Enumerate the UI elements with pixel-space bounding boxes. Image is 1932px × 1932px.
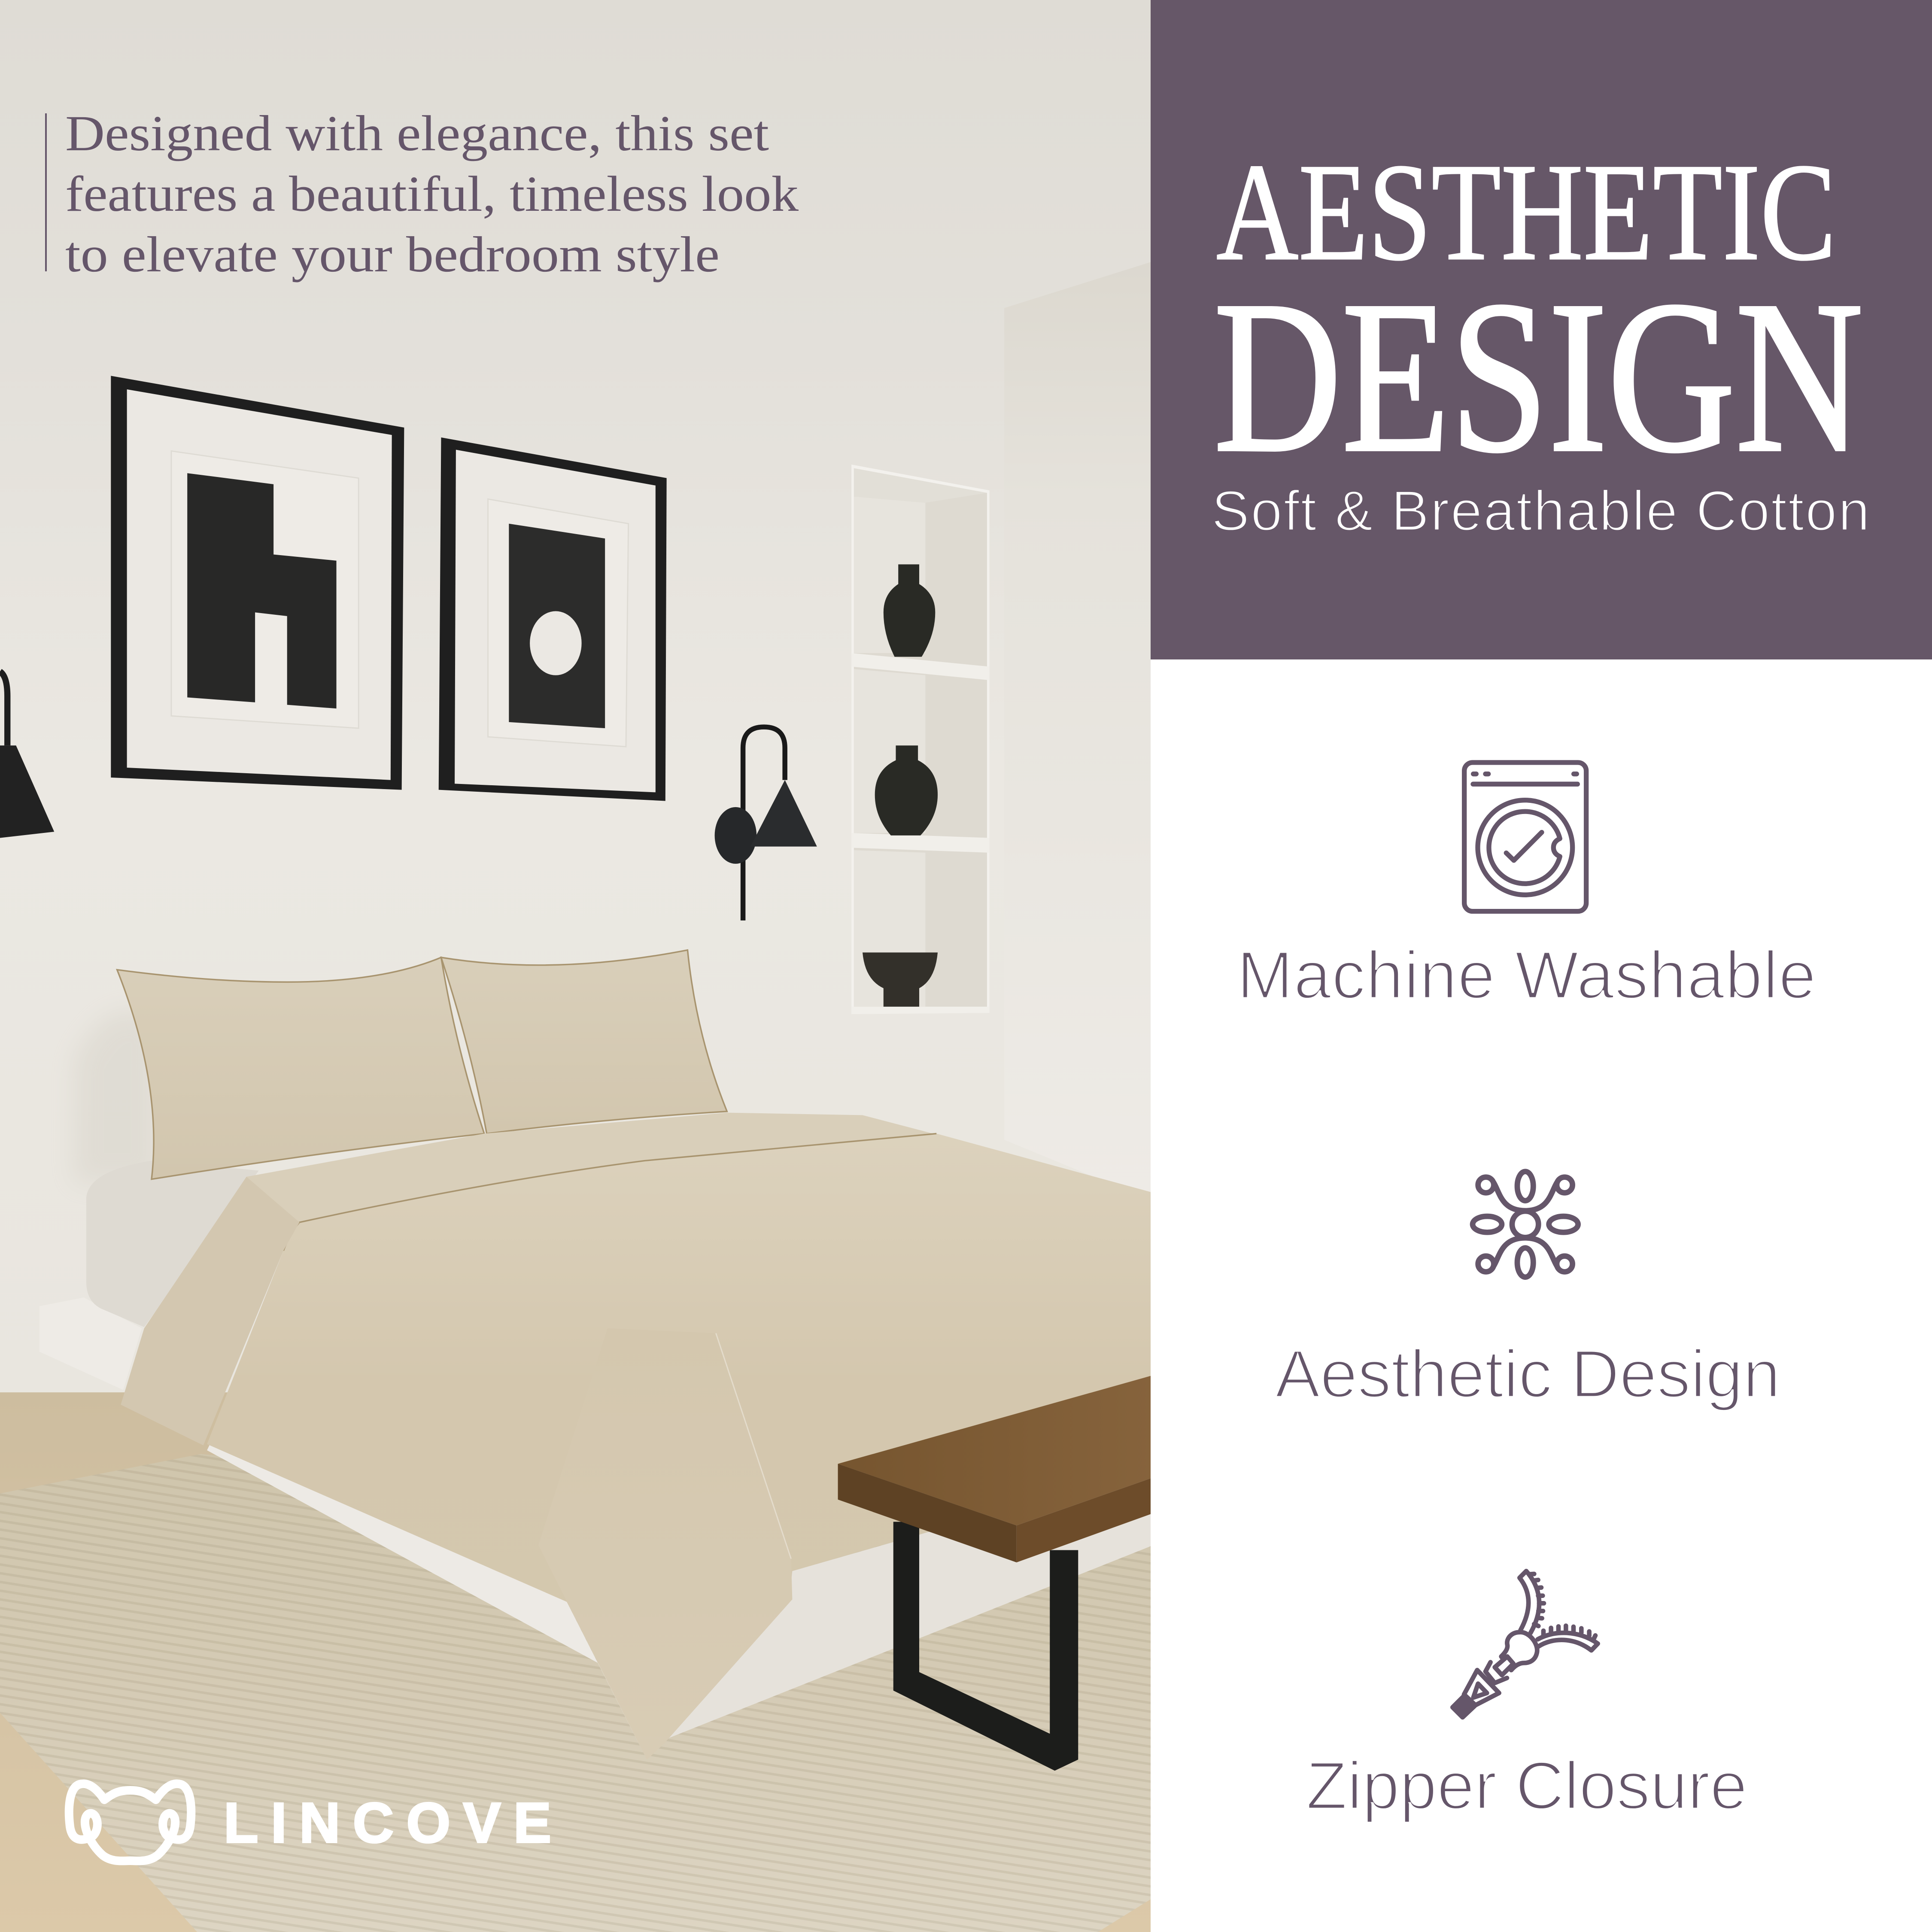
- label: machine washable: Machine Washable: [1237, 938, 1816, 1013]
- icon: washing machine: [1464, 762, 1586, 911]
- wooden floor: [0, 1392, 1153, 1932]
- logo wordmark: LINCOVE: [224, 1791, 551, 1854]
- wooden bench: [838, 1375, 1153, 1562]
- icon: flower pattern: [1473, 1172, 1578, 1277]
- icon: zipper: [1452, 1571, 1598, 1717]
- framed art right: [439, 437, 667, 801]
- duvet top band: [246, 1113, 943, 1227]
- duvet body: [207, 1133, 1153, 1759]
- left bed skirt: [207, 1427, 647, 1759]
- panel: features: [1151, 659, 1932, 1932]
- duvet: [121, 1113, 1153, 1759]
- quote accent bar: [45, 113, 47, 271]
- label: aesthetic design: Aesthetic Design: [1275, 1337, 1780, 1412]
- logo: Lincove: [69, 1784, 551, 1861]
- subheading: Soft & Breathable Cotton: [1212, 479, 1870, 542]
- fitted sheet: [86, 1161, 259, 1327]
- panel: header: [1151, 0, 1932, 659]
- wall niche with vases: [851, 465, 990, 1014]
- front bed skirt: [664, 1467, 1153, 1740]
- right pillow: [441, 950, 727, 1133]
- panel: bedroom photo scene: [0, 0, 1153, 1932]
- duvet fold piping: [283, 1133, 936, 1251]
- quote line 2: features a beautiful, timeless look: [65, 166, 799, 222]
- icon: bear head: [69, 1784, 191, 1861]
- quote line 1: Designed with elegance, this set: [65, 105, 769, 161]
- label: zipper closure: Zipper Closure: [1306, 1748, 1747, 1823]
- back wall: [0, 0, 1153, 1405]
- quote line 3: to elevate your bedroom style: [65, 226, 720, 283]
- left lamp: [0, 671, 54, 838]
- wall shadow behind bed: [74, 1010, 160, 1183]
- bed platform: [39, 1297, 142, 1390]
- wall sconce: [715, 727, 817, 920]
- right wall: [1004, 261, 1153, 1201]
- left pillow: [117, 957, 484, 1179]
- drape crease: [716, 1333, 791, 1559]
- framed art left: [111, 376, 404, 790]
- duvet corner drape: [538, 1328, 792, 1759]
- quote text block: [45, 105, 799, 283]
- bench legs: [893, 1522, 1078, 1771]
- woven rug: [0, 1454, 1153, 1932]
- duvet side drop: [121, 1177, 299, 1446]
